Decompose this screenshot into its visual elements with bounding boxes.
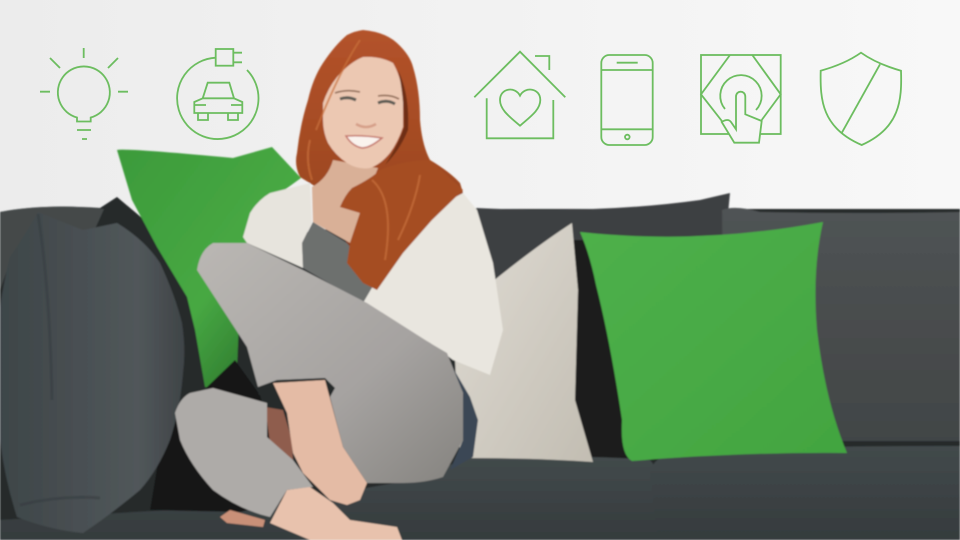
hair front lock [340, 160, 463, 290]
sofa centre back cushion [476, 193, 730, 450]
sofa base [0, 197, 960, 540]
icon: electric car with plug [177, 49, 258, 139]
bare shin and upper foot [273, 380, 367, 505]
hand on ankle [265, 407, 293, 460]
sofa left arm [0, 207, 104, 290]
icon row [40, 48, 901, 145]
shadow beside lower leg [150, 390, 290, 512]
toes behind [220, 510, 265, 527]
hair shadow by face [385, 70, 408, 165]
dark grey pillow at left [0, 212, 184, 533]
eyes [340, 98, 395, 104]
icon: smartphone [601, 55, 653, 145]
right cardigan panel [363, 193, 503, 375]
sofa seat right cushion [650, 446, 960, 540]
grey tank top [302, 222, 383, 303]
sofa right back cushion [722, 208, 960, 441]
nose shadow [356, 124, 376, 127]
smile [346, 136, 382, 148]
dark shadow below green pillow [205, 360, 262, 405]
sofa seat centre cushion [0, 457, 672, 540]
green pillow behind woman [117, 147, 301, 390]
grey pillow seam [20, 214, 100, 505]
hair behind [296, 30, 463, 290]
icon: home with heart [474, 52, 565, 138]
cream pillow [455, 223, 593, 462]
icon: touch panel with pointing hand [701, 55, 781, 143]
left cardigan panel [243, 183, 312, 268]
lower trouser leg [175, 388, 313, 517]
icon: shield [821, 53, 901, 145]
chest skin [312, 160, 378, 243]
raised trouser leg [197, 243, 463, 483]
hair highlight strands [308, 40, 420, 260]
icon: light bulb [40, 48, 128, 139]
bright green pillow [580, 222, 847, 461]
dark jeans [450, 363, 478, 470]
woman [175, 30, 503, 540]
bottom foot [270, 487, 402, 540]
sofa [0, 193, 960, 540]
shadow between cushions [570, 240, 630, 462]
face [323, 57, 403, 168]
eyebrows [335, 91, 399, 99]
